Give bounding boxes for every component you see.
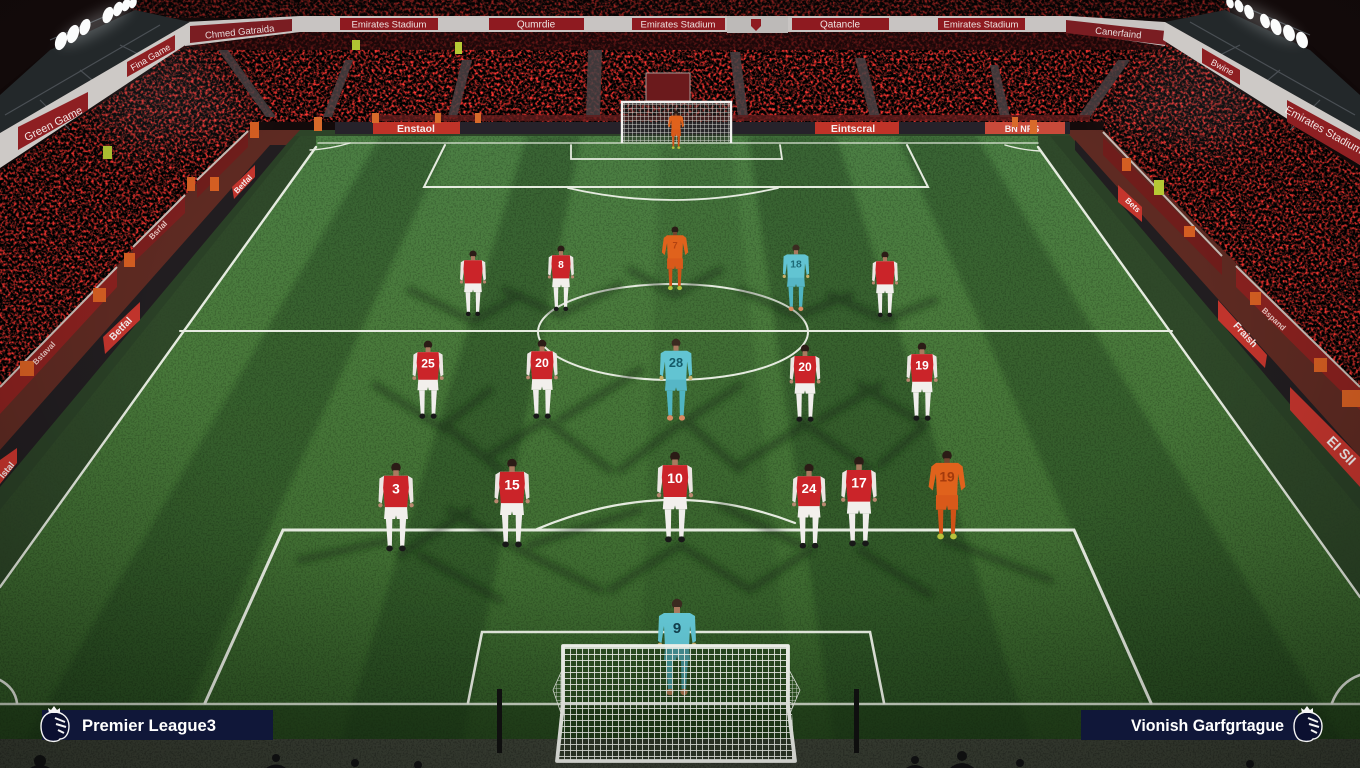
icon: lion crest right [1294,706,1322,741]
net posts [497,689,859,753]
right side ad boards: EI SII [1324,433,1359,468]
player 24 [792,464,826,549]
left roof with floodlights [0,0,190,168]
floodlights [1225,0,1310,50]
left walkway and wall [0,130,300,487]
right side ad boards [1118,185,1360,487]
goalkeeper number 9: 9 [673,620,681,637]
player orange keeper: 7 [672,240,678,250]
sign: Qatancle [792,18,889,30]
player 17: 17 [851,475,867,491]
right stand crowd [1103,42,1360,387]
player 2: 8 [558,260,564,271]
player cyan [783,245,809,311]
upper fascia with sponsor signs: Chmed Gatraida [205,23,276,42]
floodlights [53,0,138,52]
left roof with floodlights: Green Game [23,105,85,144]
stand-side stewards and top board [20,40,1360,407]
player 20 [526,340,558,419]
player orange 19 [929,451,965,539]
right side ad boards: Bspand [1260,306,1288,333]
player shadows [300,270,1050,600]
player 10: 10 [667,470,683,486]
player 15: 15 [504,477,520,492]
player cyan 28: 28 [669,355,683,370]
top goalkeeper [668,110,684,149]
player 2 [548,246,574,311]
left side ad boards [0,165,255,484]
player 3: 3 [392,481,400,496]
board: Enstaol [373,122,460,135]
left run-off [0,136,316,587]
Premier League banner right: Vionish Garfgrtague [1131,717,1284,735]
player 19 [906,343,938,421]
board: BN NRS: BN NRS [1005,124,1039,134]
seat steps [218,50,1130,117]
Premier League banner left [41,706,273,741]
crest [727,16,788,33]
player orange 19: 19 [939,469,955,484]
player 1 [460,251,486,316]
lower tier crowd: behind the goal [150,32,1210,122]
player 20 right [790,345,820,422]
left side ad boards: Betfal [108,315,135,343]
Premier League banner left: Premier League3 [82,717,216,735]
board: Enstaol: Enstaol [397,123,435,135]
player 19: 19 [915,359,929,373]
Premier League banner right [1081,706,1322,741]
right side ad boards: Fraish [1231,321,1259,350]
upper fascia with sponsor signs [185,16,1166,46]
sign: Emirates Stadium: Emirates Stadium [352,20,427,30]
icon: lion crest left [41,706,69,741]
right walkway and wall [1065,130,1360,487]
player 5 [872,252,898,317]
haze from the floodlights [60,30,1300,150]
pitch markings [0,143,1360,704]
left side ad boards: Betfal [232,173,254,195]
upper tier crowd [0,0,1360,90]
sign: Emirates Stadium: Emirates Stadium [944,20,1019,30]
left side ad boards: Bsrlal [147,219,169,241]
sign: Qumrdie [489,18,584,30]
front row players [460,227,898,317]
left side ad boards: Bstaval [31,340,57,367]
sign: Emirates Stadium: Emirates Stadium [641,20,716,30]
player 17 [841,457,877,546]
board: Eintscral: Eintscral [831,123,875,135]
player cyan 28 [660,339,692,421]
player 24: 24 [802,481,817,496]
right roof with floodlights: Bwine [1209,57,1236,78]
track-side silhouettes [30,751,1254,768]
player 25: 25 [421,357,435,371]
player cyan: 18 [790,259,802,270]
board: BN NRS [985,122,1065,134]
left roof with floodlights: Fina Game [129,42,172,73]
player 15 [494,459,530,547]
player orange keeper [662,227,688,290]
right side ad boards: Bets [1123,196,1143,215]
player 3 [378,463,414,551]
sign: Qumrdie: Qumrdie [517,20,556,30]
near goal [497,646,859,762]
upper fascia with sponsor signs: Canerfaind [1095,26,1142,41]
sign: Qatancle: Qatancle [820,20,860,30]
board: Eintscral [815,122,899,135]
player 20 right: 20 [798,360,812,374]
goalkeeper number 9 [658,599,696,695]
right run-off [1038,136,1360,597]
middle row players [412,339,938,422]
player 20: 20 [535,356,549,370]
sign: Emirates Stadium [340,18,438,30]
right roof with floodlights [1163,0,1360,165]
rear row players [378,451,965,551]
player 25 [412,341,444,419]
behind-goal dark strip and grey track [0,705,1360,768]
top goal with keeper [621,73,731,149]
player 10 [657,452,693,542]
left stand crowd [0,45,255,387]
